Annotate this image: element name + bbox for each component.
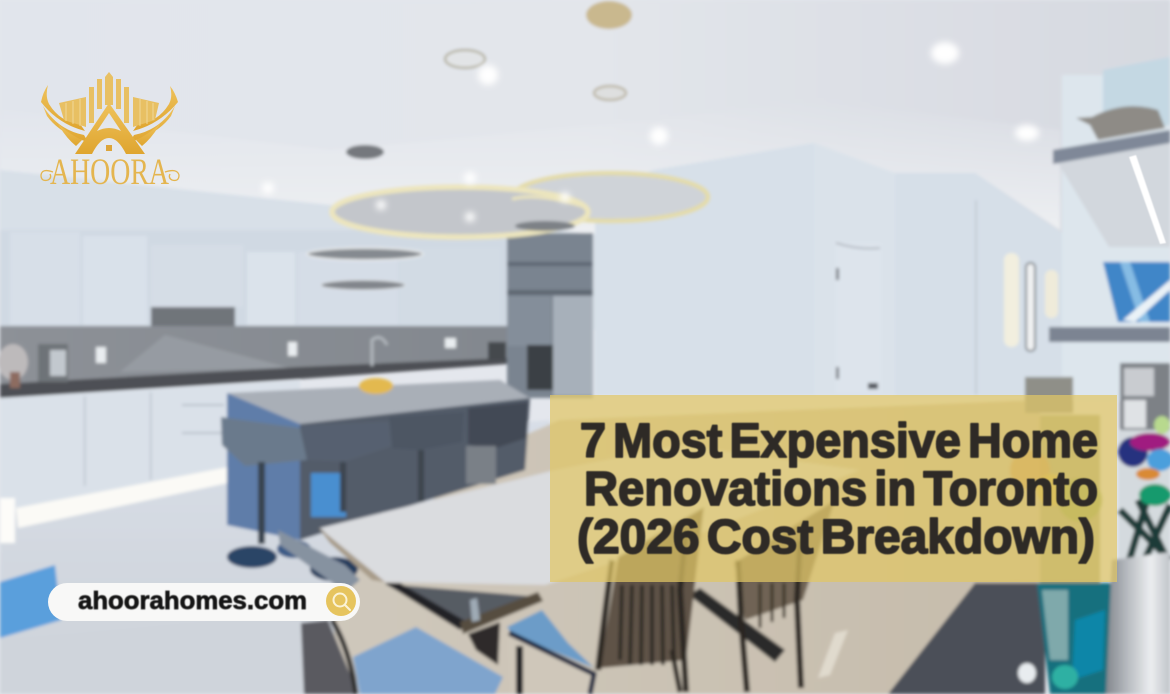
back wall xyxy=(0,170,600,330)
silver vase xyxy=(1106,552,1170,694)
counter accessories xyxy=(0,337,506,388)
dining floor left xyxy=(0,612,370,694)
middle dining chair with blue seat xyxy=(507,507,704,694)
lower cabinets xyxy=(0,380,300,512)
kitchen island xyxy=(227,378,530,540)
bar stools xyxy=(221,402,528,592)
blue rug xyxy=(0,565,61,638)
counter xyxy=(0,358,507,398)
shelf hood below upper shelf xyxy=(1058,143,1170,247)
title banner: translucent yellow panel xyxy=(550,395,1117,582)
logo: Ahoora gold crest xyxy=(41,72,179,193)
logo wordmark: AHOORA xyxy=(50,152,169,193)
pendant light rings xyxy=(332,173,708,237)
white backdrop xyxy=(1118,430,1170,560)
LED toe-kick strip xyxy=(16,467,228,528)
jar behind banner xyxy=(1025,377,1073,413)
far right wall xyxy=(1062,75,1170,400)
flower blooms xyxy=(1118,437,1148,467)
title line 2: Renovations in Toronto xyxy=(584,463,1098,516)
title line 1: 7 Most Expensive Home xyxy=(580,415,1098,468)
table glass base xyxy=(385,583,543,665)
stainless fridge column xyxy=(507,233,593,398)
far hall wall xyxy=(895,173,1062,396)
pill background xyxy=(48,583,360,621)
icon: left wing xyxy=(41,85,88,146)
wordmark flourishes xyxy=(41,171,179,180)
door wall xyxy=(814,143,895,396)
right wall xyxy=(595,143,814,396)
icon: small window xyxy=(106,145,112,151)
wood floor by island xyxy=(330,400,1040,694)
floating shelves xyxy=(1049,106,1170,342)
flowers and vases on counter xyxy=(1010,363,1170,694)
range hood xyxy=(151,307,235,327)
left dining chair xyxy=(301,620,503,694)
icon: search magnifier xyxy=(326,586,356,616)
floor reflection xyxy=(1018,663,1036,683)
table beam xyxy=(689,588,785,662)
stems xyxy=(1120,490,1170,570)
right dining chair xyxy=(734,500,835,692)
dining table top xyxy=(320,445,860,585)
flowers behind banner xyxy=(1040,415,1100,585)
wall sconces xyxy=(1004,253,1058,351)
dark stone floor xyxy=(888,583,1045,694)
backsplash xyxy=(0,326,507,388)
website pill xyxy=(48,583,360,621)
bright ceiling near wall line xyxy=(0,100,1060,235)
lower shelf xyxy=(1049,327,1170,342)
blue artwork xyxy=(1103,262,1170,322)
door and panel seams xyxy=(836,200,977,395)
upper cabinets xyxy=(0,230,507,326)
icon: city skyline xyxy=(59,72,159,127)
fruit bowl xyxy=(359,378,393,394)
website address: ahoorahomes.com xyxy=(78,587,307,615)
teal vase xyxy=(1037,583,1113,694)
title text xyxy=(577,415,1098,564)
icon: central letter A xyxy=(75,103,145,154)
title line 3: (2026 Cost Breakdown) xyxy=(577,511,1095,564)
upper shelf xyxy=(1053,130,1170,164)
ceiling light glows xyxy=(262,42,1166,244)
pendant fixtures on ceiling xyxy=(346,1,632,159)
wood plank highlight xyxy=(818,630,848,678)
ceiling xyxy=(0,0,1170,300)
coffee machine xyxy=(1120,363,1170,431)
icon: right wing xyxy=(130,86,178,146)
floor xyxy=(0,420,550,694)
blue upper wall xyxy=(1103,57,1170,135)
hanging discs xyxy=(307,248,423,290)
cat sculpture xyxy=(1076,106,1165,140)
shelf LED strip xyxy=(1129,155,1166,244)
